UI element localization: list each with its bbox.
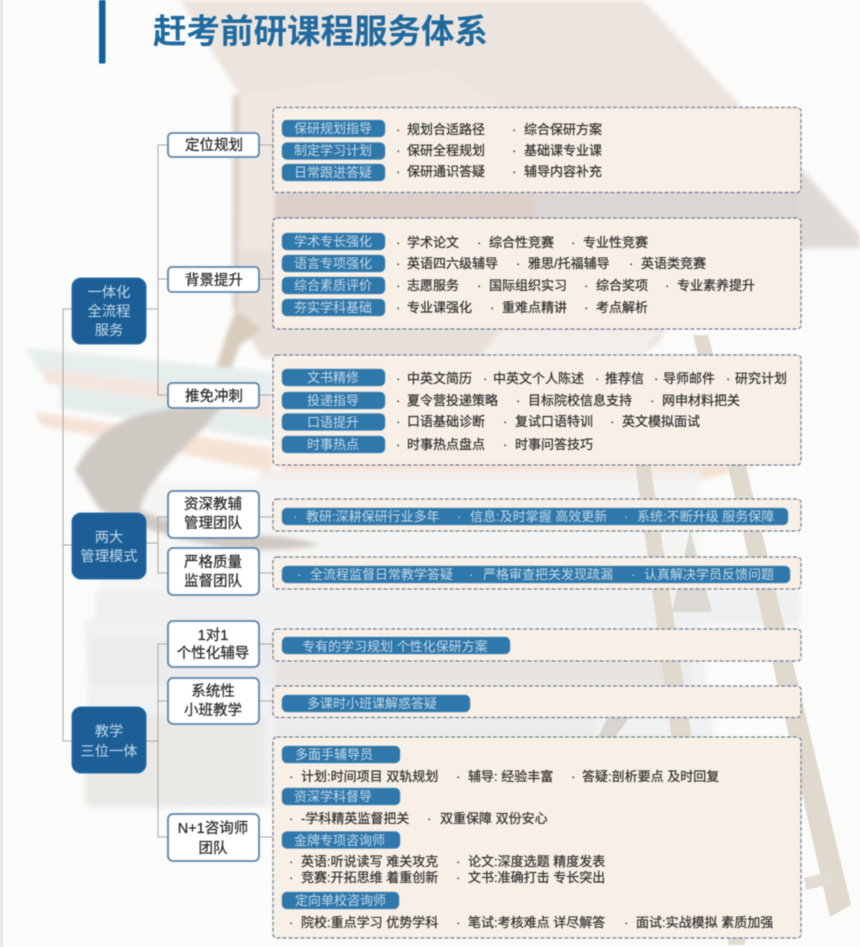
panel: N+1咨询师团队 details: [273, 737, 801, 938]
node: 1对1个性化辅导: 1对1: [198, 627, 228, 644]
panel: N+1咨询师团队 details: ·: [289, 769, 293, 784]
panel: N+1咨询师团队 details: 计划:时间项目 双轨规划: [301, 769, 438, 784]
panel: 定位规划 details: 基础课专业课: [524, 143, 602, 158]
panel: N+1咨询师团队 details: ·: [624, 915, 628, 930]
panel: 背景提升 details: ·: [584, 278, 588, 293]
panel: 资深教辅管理团队 details: 信息:及时掌握 高效更新: [470, 509, 607, 524]
panel: N+1咨询师团队 details: 定向单校咨询师: [295, 893, 386, 908]
panel: 推免冲刺 details: ·: [516, 393, 520, 408]
panel: 背景提升 details: ·: [629, 256, 633, 271]
panel: 资深教辅管理团队 details: ·: [293, 509, 297, 524]
panel: 背景提升 details: 英语四六级辅导: [407, 256, 498, 271]
panel: 背景提升 details: 综合性竞赛: [489, 235, 554, 250]
panel: 背景提升 details: 专业性竞赛: [583, 235, 648, 250]
panel: 推免冲刺 details: ·: [396, 393, 400, 408]
panel: 推免冲刺 details: ·: [726, 371, 730, 386]
root node: 教学三位一体: 三位一体: [80, 743, 138, 760]
panel: 推免冲刺 details: ·: [396, 371, 400, 386]
panel: 定位规划 details: 保研通识答疑: [407, 164, 485, 179]
panel: 背景提升 details: 综合素质评价: [294, 278, 372, 293]
panel: 推免冲刺 details: 复试口语特训: [515, 414, 593, 429]
panel: N+1咨询师团队 details: -学科精英监督把关: [301, 811, 409, 826]
panel: N+1咨询师团队 details: 文书:准确打击 专长突出: [468, 870, 605, 885]
panel: 背景提升 details: ·: [490, 300, 494, 315]
panel: N+1咨询师团队 details: 资深学科督导: [294, 789, 372, 804]
panel: N+1咨询师团队 details: ·: [289, 811, 293, 826]
node: 严格质量监督团队: 监督团队: [184, 573, 242, 590]
node: 1对1个性化辅导: [168, 621, 259, 667]
node: 定位规划: [168, 133, 259, 157]
panel: 背景提升 details: ·: [396, 300, 400, 315]
panel: 资深教辅管理团队 details: ·: [624, 509, 628, 524]
panel: 定位规划 details: ·: [512, 143, 516, 158]
panel: 推免冲刺 details: 时事热点盘点: [407, 437, 485, 452]
panel: N+1咨询师团队 details: ·: [456, 854, 460, 869]
panel: N+1咨询师团队 details: 多面手辅导员: [295, 747, 373, 762]
panel: N+1咨询师团队 details: 双重保障 双份安心: [440, 811, 548, 826]
panel: N+1咨询师团队 details: ·: [571, 769, 575, 784]
panel: 推免冲刺 details: ·: [610, 414, 614, 429]
panel: 资深教辅管理团队 details: ·: [457, 509, 461, 524]
panel: 背景提升 details: [273, 218, 801, 329]
panel: N+1咨询师团队 details: 笔试:考核难点 详尽解答: [468, 915, 605, 930]
connector lines: [63, 145, 273, 837]
panel: 定位规划 details: 综合保研方案: [524, 122, 602, 137]
node: 资深教辅管理团队: 管理团队: [184, 515, 242, 532]
root node: 一体化全流程服务: 一体化: [88, 284, 130, 301]
panel: N+1咨询师团队 details: 金牌专项咨询师: [294, 833, 385, 848]
panel: 推免冲刺 details: ·: [396, 414, 400, 429]
panel: N+1咨询师团队 details: 院校:重点学习 优势学科: [301, 915, 438, 930]
panel: 定位规划 details: ·: [512, 122, 516, 137]
node: 资深教辅管理团队: 资深教辅: [184, 496, 242, 513]
root node: 两大管理模式: 两大: [95, 529, 123, 546]
panel: 背景提升 details: 英语类竞赛: [641, 256, 706, 271]
panel: 推免冲刺 details: ·: [503, 414, 507, 429]
node: 系统性小班教学: [168, 678, 259, 724]
title: 赶考前研课程服务体系: [153, 14, 488, 51]
panel: 背景提升 details: ·: [396, 278, 400, 293]
panel: 推免冲刺 details: ·: [654, 371, 658, 386]
panel: 推免冲刺 details: 投递指导: [307, 393, 359, 408]
panel: 资深教辅管理团队 details: 系统:不断升级 服务保障: [637, 509, 774, 524]
panel: 背景提升 details: 学术专长强化: [294, 234, 372, 249]
node: N+1咨询师团队: N+1咨询师: [178, 820, 248, 837]
panel: 推免冲刺 details: 时事热点: [307, 437, 359, 452]
root node: 一体化全流程服务: 全流程: [88, 302, 130, 320]
panel: 背景提升 details: ·: [571, 235, 575, 250]
panel: 定位规划 details: 规划合适路径: [407, 122, 485, 137]
panel: N+1咨询师团队 details: 面试:实战模拟 素质加强: [636, 915, 773, 930]
panel: 严格质量监督团队 details: ·: [469, 567, 473, 582]
panel: 推免冲刺 details: ·: [396, 437, 400, 452]
panel: 推免冲刺 details: 英文模拟面试: [622, 414, 700, 429]
panel: 严格质量监督团队 details: 认真解决学员反馈问题: [644, 567, 774, 582]
panel: N+1咨询师团队 details: ·: [427, 811, 431, 826]
panel: N+1咨询师团队 details: ·: [456, 870, 460, 885]
panel: 系统性小班教学 details: 多课时小班课解惑答疑: [307, 696, 437, 711]
root node: 一体化全流程服务: [72, 278, 146, 344]
panel: 推免冲刺 details: 目标院校信息支持: [528, 393, 632, 408]
panel: 背景提升 details: 雅思/托福辅导: [528, 256, 610, 271]
panel: 1对1个性化辅导 details: [273, 629, 801, 661]
panel: N+1咨询师团队 details: ·: [456, 915, 460, 930]
panel: 严格质量监督团队 details: 全流程监督日常教学答疑: [310, 567, 453, 582]
panel: 定位规划 details: 日常跟进答疑: [294, 165, 372, 180]
panel: 推免冲刺 details: [273, 355, 801, 465]
panel: N+1咨询师团队 details: ·: [289, 870, 293, 885]
root node: 两大管理模式: 管理模式: [80, 548, 138, 565]
node: N+1咨询师团队: 团队: [198, 840, 228, 857]
root node: 两大管理模式: [72, 513, 146, 579]
panel: 背景提升 details: 专业素养提升: [677, 278, 755, 293]
panel: 背景提升 details: ·: [396, 235, 400, 250]
panel: 定位规划 details: ·: [396, 164, 400, 179]
panel: 推免冲刺 details: ·: [503, 437, 507, 452]
panel: 背景提升 details: 学术论文: [407, 235, 459, 250]
panel: 定位规划 details: [273, 108, 801, 192]
panel: 定位规划 details: 保研规划指导: [294, 121, 372, 136]
panel: N+1咨询师团队 details: 竞赛:开拓思维 着重创新: [301, 870, 438, 885]
panel: 背景提升 details: ·: [665, 278, 669, 293]
title accent bar: [99, 0, 106, 64]
node: 资深教辅管理团队: [168, 491, 259, 538]
panel: 推免冲刺 details: 夏令营投递策略: [407, 393, 498, 408]
panel: 背景提升 details: ·: [584, 300, 588, 315]
panel: 背景提升 details: ·: [477, 278, 481, 293]
node: 严格质量监督团队: 严格质量: [184, 554, 242, 571]
panel: 资深教辅管理团队 details: [273, 499, 801, 531]
panel: 资深教辅管理团队 details: 教研:深耕保研行业多年: [306, 509, 440, 524]
panel: N+1咨询师团队 details: 辅导: 经验丰富: [468, 769, 553, 784]
panel: N+1咨询师团队 details: 答疑:剖析要点 及时回复: [582, 769, 719, 784]
panel: N+1咨询师团队 details: ·: [289, 854, 293, 869]
panel: 定位规划 details: 制定学习计划: [294, 143, 372, 158]
panel: 推免冲刺 details: 研究计划: [735, 371, 787, 386]
panel: 严格质量监督团队 details: ·: [631, 567, 635, 582]
node: 背景提升: [168, 267, 259, 292]
panel: N+1咨询师团队 details: 英语:听说读写 难关攻克: [301, 854, 438, 869]
panel: 系统性小班教学 details: [273, 686, 801, 718]
node: 推免冲刺: [168, 383, 259, 408]
panel: 定位规划 details: ·: [512, 164, 516, 179]
panel: 1对1个性化辅导 details: 专有的学习规划 个性化保研方案: [302, 639, 488, 654]
panel: N+1咨询师团队 details: ·: [289, 915, 293, 930]
panel: 背景提升 details: 专业课强化: [407, 300, 472, 315]
node: 1对1个性化辅导: 个性化辅导: [177, 645, 249, 662]
panel: 严格质量监督团队 details: ·: [297, 567, 301, 582]
node: 定位规划: 定位规划: [185, 137, 243, 154]
panel: 推免冲刺 details: 中英文简历: [407, 371, 472, 386]
panel: 背景提升 details: 夯实学科基础: [294, 300, 372, 315]
panel: 定位规划 details: 辅导内容补充: [524, 164, 602, 179]
panel: N+1咨询师团队 details: 论文:深度选题 精度发表: [468, 854, 605, 869]
node: N+1咨询师团队: [168, 814, 259, 861]
node: 系统性小班教学: 小班教学: [184, 702, 242, 719]
panel: 推免冲刺 details: 文书精修: [307, 370, 359, 385]
panel: 推免冲刺 details: 导师邮件: [663, 371, 715, 386]
panel: 背景提升 details: 考点解析: [596, 300, 648, 315]
panel: 背景提升 details: 语言专项强化: [294, 256, 372, 271]
panel: 背景提升 details: ·: [516, 256, 520, 271]
root node: 一体化全流程服务: 服务: [95, 322, 123, 339]
panel: 推免冲刺 details: 网申材料把关: [662, 393, 740, 408]
panel: 定位规划 details: 保研全程规划: [407, 143, 485, 158]
panel: 推免冲刺 details: ·: [595, 371, 599, 386]
panel: 推免冲刺 details: ·: [650, 393, 654, 408]
panel: 推免冲刺 details: ·: [483, 371, 487, 386]
node: 背景提升: 背景提升: [185, 272, 243, 289]
panel: 背景提升 details: ·: [396, 256, 400, 271]
root node: 教学三位一体: 教学: [95, 723, 123, 740]
panel: 推免冲刺 details: 推荐信: [605, 371, 644, 386]
node: 严格质量监督团队: [168, 548, 259, 595]
root node: 教学三位一体: [72, 707, 146, 773]
panel: 推免冲刺 details: 中英文个人陈述: [493, 371, 584, 386]
panel: 推免冲刺 details: 时事问答技巧: [515, 437, 593, 452]
panel: 背景提升 details: 志愿服务: [407, 278, 459, 293]
panel: 推免冲刺 details: 口语基础诊断: [407, 414, 485, 429]
panel: 严格质量监督团队 details: 严格审查把关发现疏漏: [483, 567, 613, 582]
panel: 定位规划 details: ·: [396, 143, 400, 158]
panel: 推免冲刺 details: 口语提升: [307, 415, 359, 430]
node: 系统性小班教学: 系统性: [191, 683, 235, 700]
panel: 严格质量监督团队 details: [273, 557, 801, 589]
node: 推免冲刺: 推免冲刺: [185, 388, 243, 405]
panel: N+1咨询师团队 details: ·: [456, 769, 460, 784]
panel: 背景提升 details: 综合奖项: [596, 278, 648, 293]
panel: 定位规划 details: ·: [396, 122, 400, 137]
panel: 背景提升 details: ·: [477, 235, 481, 250]
panel: 背景提升 details: 重难点精讲: [502, 300, 567, 315]
panel: 背景提升 details: 国际组织实习: [489, 278, 567, 293]
